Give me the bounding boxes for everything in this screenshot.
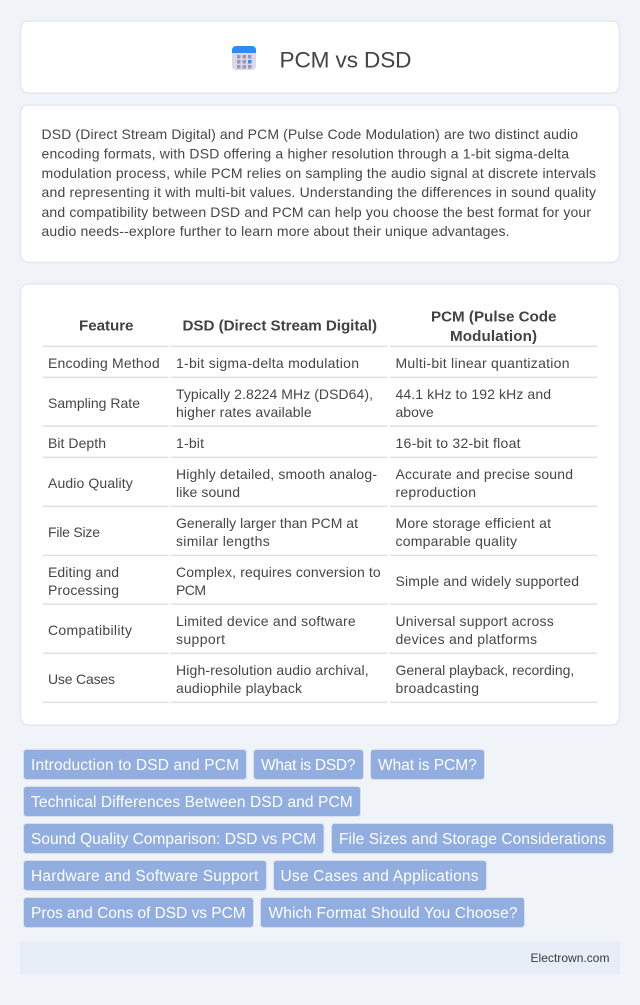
- row: editing and processing: Simple and widely supported: [396, 573, 579, 589]
- row: audio quality: Accurate and precise sound: [396, 466, 573, 482]
- row: sampling rate: [48, 386, 551, 420]
- row: bit depth: [48, 435, 521, 451]
- link: pros and cons: Pros and Cons of DSD vs PCM: [31, 905, 246, 922]
- table header: Feature: [79, 318, 134, 334]
- row: compatibility: Limited device and software: [176, 613, 356, 629]
- row: audio quality: like sound: [176, 484, 240, 500]
- link: introduction: [24, 750, 246, 780]
- row: use cases: audiophile playback: [176, 680, 303, 696]
- link: what is PCM: What is PCM?: [378, 757, 477, 774]
- row: audio quality: reproduction: [396, 484, 476, 500]
- link: what is PCM: [370, 750, 484, 780]
- row: audio quality: Highly detailed, smooth analog-: [176, 466, 377, 482]
- row: sampling rate: above: [396, 404, 434, 420]
- row: sampling rate: Sampling Rate: [48, 395, 140, 411]
- row: editing and processing: Processing: [48, 582, 119, 598]
- row: use cases: General playback, recording,: [396, 662, 574, 678]
- row: use cases: High-resolution audio archival,: [176, 662, 369, 678]
- link: sound quality: Sound Quality Comparison: DSD vs PCM: [31, 831, 316, 848]
- link: technical differences: [24, 786, 360, 816]
- link: what is DSD: [254, 750, 364, 780]
- row: bit depth: 16-bit to 32-bit float: [396, 435, 521, 451]
- icon: calendar: [232, 46, 256, 70]
- intro paragraph: and representing it with multi-bit values. Understanding the differences in sound quality: [42, 184, 596, 200]
- row: editing and processing: PCM: [176, 582, 206, 598]
- link: technical differences: Technical Differences Between DSD and PCM: [31, 794, 353, 811]
- link: pros and cons: [24, 898, 254, 928]
- row: file size: comparable quality: [396, 533, 517, 549]
- table header: DSD (Direct Stream Digital): [182, 318, 377, 334]
- link: what is DSD: What is DSD?: [261, 757, 356, 774]
- row: file size: Generally larger than PCM at: [176, 515, 358, 531]
- title: PCM vs DSD: [280, 48, 412, 72]
- link: hardware and software: [24, 860, 266, 890]
- row: compatibility: devices and platforms: [396, 631, 537, 647]
- link: hardware and software: Hardware and Software Support: [31, 868, 259, 885]
- table header: PCM (Pulse Code: [431, 308, 556, 326]
- table header: [79, 308, 556, 345]
- intro paragraph: modulation process, while PCM relies on sampling the audio signal at discrete intervals: [42, 165, 596, 181]
- row: encoding method: [48, 355, 570, 371]
- row: compatibility: support: [176, 631, 225, 647]
- topic links: [24, 750, 614, 928]
- table header: Modulation): [450, 328, 537, 345]
- row: file size: More storage efficient at: [396, 515, 551, 531]
- row: compatibility: [48, 613, 554, 647]
- row: editing and processing: Complex, requires conversion to: [176, 564, 381, 580]
- link: which format: [260, 898, 524, 928]
- link: sound quality: [24, 824, 324, 854]
- row: audio quality: Audio Quality: [48, 475, 133, 491]
- row: use cases: [48, 662, 574, 696]
- intro paragraph: DSD (Direct Stream Digital) and PCM (Pulse Code Modulation) are two distinct audio: [42, 126, 578, 142]
- row: sampling rate: higher rates available: [176, 404, 312, 420]
- row: encoding method: Encoding Method: [48, 355, 160, 371]
- intro paragraph: audio needs--explore further to learn more about their unique advantages.: [42, 223, 510, 239]
- row: bit depth: 1-bit: [176, 435, 204, 451]
- row: sampling rate: Typically 2.8224 MHz (DSD64),: [176, 386, 373, 402]
- intro paragraph: encoding formats, with DSD offering a higher resolution through a 1-bit sigma-delta: [42, 146, 569, 162]
- row: file size: similar lengths: [176, 533, 270, 549]
- link: file sizes: [332, 824, 614, 854]
- link: introduction: Introduction to DSD and PCM: [31, 757, 239, 774]
- row: editing and processing: Editing and: [48, 564, 119, 580]
- row: bit depth: Bit Depth: [48, 435, 106, 451]
- link: file sizes: File Sizes and Storage Considerations: [339, 831, 606, 848]
- row: audio quality: [48, 466, 573, 500]
- link: use cases: Use Cases and Applications: [280, 868, 479, 885]
- panel: comparison table: [20, 284, 620, 725]
- intro paragraph: and compatibility between DSD and PCM can help you choose the best format for your: [42, 204, 591, 220]
- link: which format: Which Format Should You Choose?: [268, 905, 518, 922]
- row: encoding method: Multi-bit linear quantization: [396, 355, 570, 371]
- row: use cases: broadcasting: [396, 680, 479, 696]
- link: use cases: [274, 860, 486, 890]
- table row rules: [43, 346, 597, 703]
- footer credit: Electrown.com: [530, 951, 610, 965]
- row: compatibility: Compatibility: [48, 622, 132, 638]
- panel: introduction text: [20, 105, 620, 262]
- row: encoding method: 1-bit sigma-delta modulation: [176, 355, 359, 371]
- header panel: [20, 21, 620, 93]
- row: file size: File Size: [48, 524, 100, 540]
- row: editing and processing: [48, 564, 579, 598]
- footer: [20, 941, 620, 975]
- row: compatibility: Universal support across: [396, 613, 554, 629]
- row: sampling rate: 44.1 kHz to 192 kHz and: [396, 386, 551, 402]
- row: use cases: Use Cases: [48, 671, 115, 687]
- intro paragraph: [42, 126, 596, 239]
- row: file size: [48, 515, 551, 549]
